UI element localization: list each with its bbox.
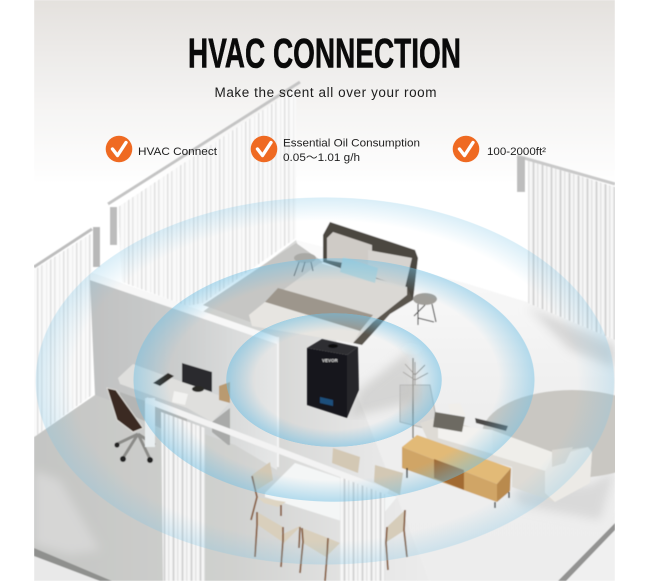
back left curtain <box>108 82 300 306</box>
throw blanket <box>433 412 465 432</box>
chair back left <box>251 462 286 520</box>
subtitle: Make the scent all over your room <box>214 85 436 100</box>
label: HVAC Connect <box>138 146 217 158</box>
device top <box>307 339 358 355</box>
outer ring <box>35 197 615 565</box>
title: HVAC CONNECTION <box>188 30 461 76</box>
chair front right <box>385 510 407 570</box>
floor <box>34 240 615 581</box>
partition wall <box>90 272 279 470</box>
headboard <box>323 222 418 300</box>
middle ring <box>133 258 535 502</box>
scent coverage rings <box>35 197 615 565</box>
monitor <box>182 363 212 392</box>
device shadow <box>348 350 420 418</box>
cushion <box>552 447 573 467</box>
background wall gradient <box>34 0 615 300</box>
front curtain rail <box>145 398 388 492</box>
side table and lamp <box>399 358 436 439</box>
TV console <box>402 435 511 508</box>
white pillow <box>448 403 466 416</box>
side pillows <box>368 250 412 288</box>
nightstand left <box>294 253 316 276</box>
left seat cushion <box>438 426 493 454</box>
dining table <box>264 463 396 520</box>
label: Essential Oil Consumption <box>283 138 420 150</box>
sofa body <box>422 422 582 492</box>
device logo: VEVOR <box>322 358 339 363</box>
office chair <box>107 388 155 463</box>
tray <box>475 418 508 431</box>
feature: coverage area <box>453 136 546 162</box>
chair back middle <box>332 448 360 473</box>
mattress <box>284 264 408 340</box>
desk organiser <box>219 382 230 403</box>
blue pillow <box>340 257 378 283</box>
front curtain left <box>161 412 205 581</box>
far left curtain <box>34 227 100 437</box>
front of duvet <box>249 302 360 343</box>
icon: orange check <box>106 136 132 162</box>
chair back right <box>374 465 403 495</box>
nightstand right <box>413 293 437 325</box>
back pillows <box>327 232 372 268</box>
chair front left <box>255 512 302 567</box>
bed base side <box>353 287 413 345</box>
rug <box>482 390 615 478</box>
right seat cushion <box>492 430 552 473</box>
device screen <box>320 397 333 406</box>
front curtain right <box>340 477 385 581</box>
right arm <box>545 447 592 502</box>
dining chairs <box>251 448 407 581</box>
device side <box>347 347 359 418</box>
icon: orange check <box>453 136 479 162</box>
label: 0.05～1.01 g/h <box>283 152 360 164</box>
feature: HVAC connect <box>106 136 217 162</box>
feature: oil consumption <box>251 136 420 164</box>
inner ring <box>226 313 442 447</box>
label: 100-2000ft² <box>487 146 546 158</box>
desk <box>118 364 232 445</box>
icon: orange check <box>251 136 277 162</box>
bed <box>249 222 418 345</box>
sofa <box>420 403 592 502</box>
diffuser device <box>307 339 420 418</box>
blanket band <box>265 288 373 331</box>
chair front middle <box>300 528 340 581</box>
device front <box>307 348 347 418</box>
right curtain <box>517 156 615 340</box>
